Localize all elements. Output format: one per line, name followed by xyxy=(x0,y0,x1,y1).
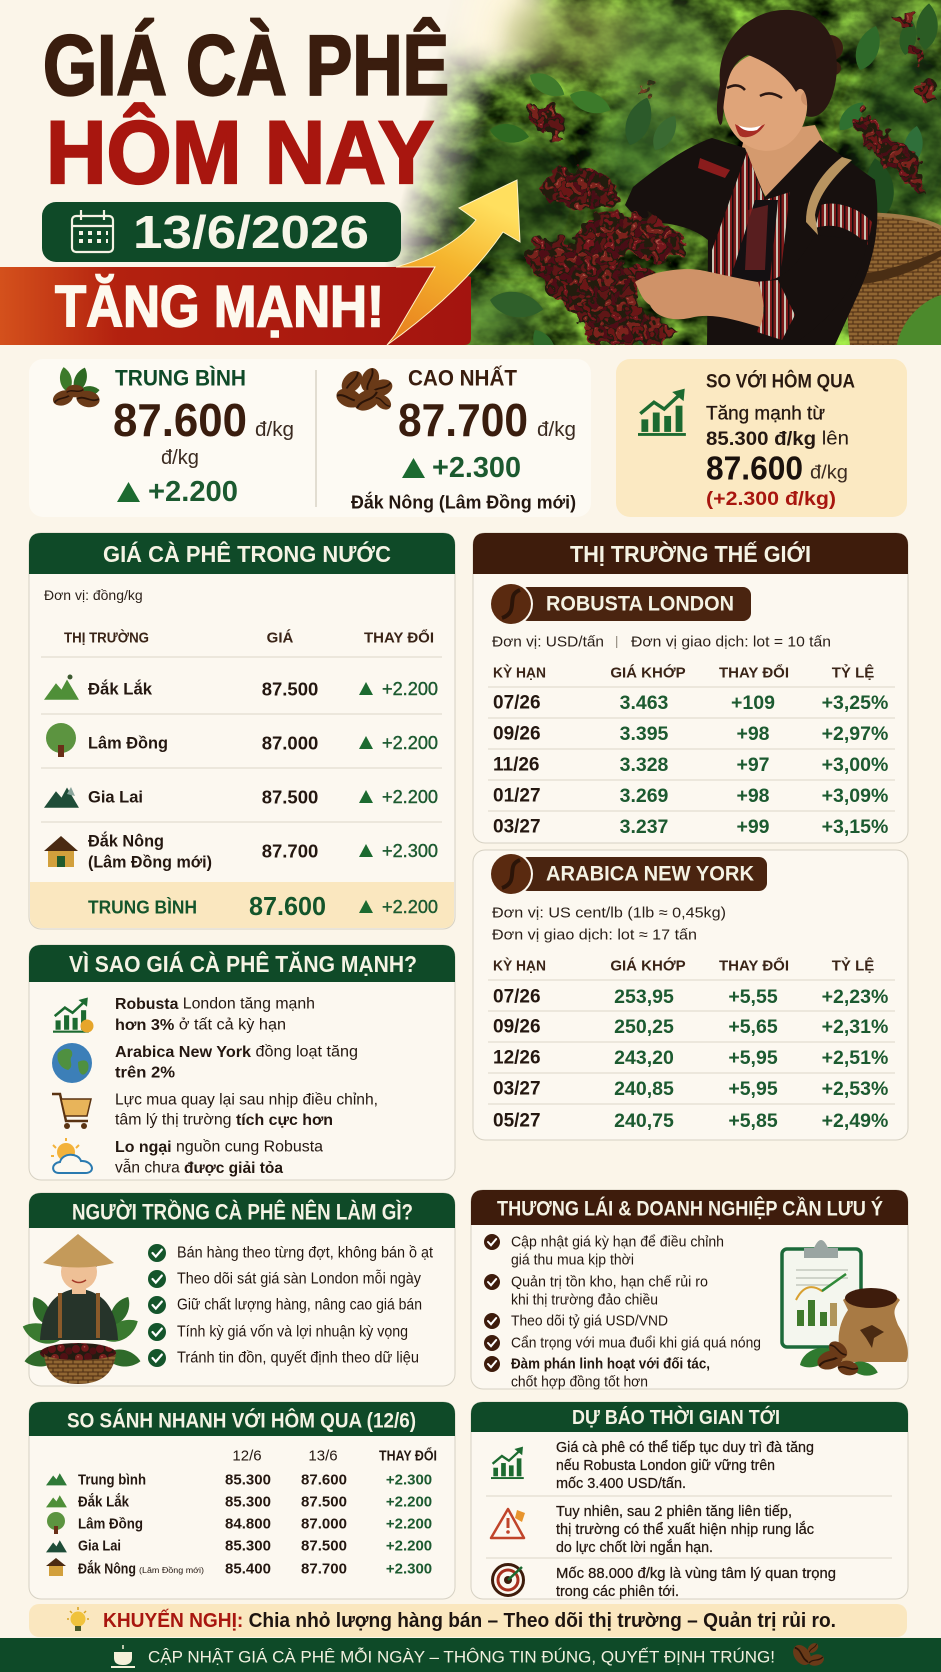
table rows: +2,51% xyxy=(822,1047,888,1069)
checklist: Giữ chất lượng hàng, nâng cao giá bán xyxy=(177,1296,422,1314)
woman: cuff xyxy=(753,280,795,340)
row values: 85.400 xyxy=(225,1560,271,1578)
woman: strap xyxy=(806,157,852,235)
row values: +2.300 xyxy=(386,1560,432,1578)
heading xyxy=(473,533,908,574)
forecast 1: nếu Robusta London giữ vững trên xyxy=(556,1458,775,1474)
panel: so với hôm qua xyxy=(616,359,907,517)
table rows: +3,25% xyxy=(822,692,888,714)
row values: +2.200 xyxy=(386,1494,432,1510)
forecast 1: mốc 3.400 USD/tấn. xyxy=(556,1476,686,1492)
table rows: 3.395 xyxy=(620,723,669,745)
table head: KỲ HẠN xyxy=(493,664,546,682)
row labels: Đắk Nông xyxy=(78,1560,136,1578)
row: Lâm Đồng: Lâm Đồng xyxy=(88,734,168,752)
table rows: +3,00% xyxy=(822,754,888,776)
reason: robusta: hơn 3% ở tất cả kỳ hạn xyxy=(115,1016,286,1034)
row values: +2.300 xyxy=(386,1472,432,1488)
table rows xyxy=(493,986,888,1132)
row values: 85.300 xyxy=(225,1472,271,1488)
row labels: Lâm Đồng xyxy=(78,1516,143,1532)
table rows: 09/26 xyxy=(493,724,541,744)
icon: sun and cloud xyxy=(51,1138,92,1173)
table head xyxy=(493,664,874,682)
icon: chart xyxy=(491,1447,524,1479)
table rows: +2,23% xyxy=(822,986,888,1008)
icon: light bulb xyxy=(67,1607,89,1631)
table header: GIÁ xyxy=(267,630,293,646)
illustration: clipboard and coffee sack xyxy=(782,1240,908,1379)
forecast 2 xyxy=(556,1504,814,1556)
heading: DỰ BÁO THỜI GIAN TỚI xyxy=(572,1405,780,1429)
checklist: Theo dõi sát giá sàn London mỗi ngày xyxy=(177,1270,421,1288)
panel: KPI trung bình và cao nhất xyxy=(29,359,591,517)
table rows: 03/27 xyxy=(493,816,541,838)
banner: tăng mạnh xyxy=(0,267,471,345)
banner: tăng mạnh: TĂNG MẠNH! xyxy=(55,274,384,340)
table rows: +109 xyxy=(731,692,775,714)
forecast 3 xyxy=(556,1566,836,1600)
table rows: 05/27 xyxy=(493,1110,541,1132)
heading xyxy=(471,1402,908,1432)
date pill: 13/6/2026 xyxy=(133,206,369,258)
table rows: +98 xyxy=(736,785,770,807)
text: footer: CẬP NHẬT GIÁ CÀ PHÊ MỖI NGÀY – THÔNG TIN ĐÚNG, QUYẾT ĐỊNH TRÚNG! xyxy=(148,1648,775,1666)
icon: globe xyxy=(52,1043,92,1083)
checklist: Tránh tin đồn, quyết định theo dữ liệu xyxy=(177,1350,419,1366)
checklist: Cẩn trọng với mua đuổi khi giá quá nóng xyxy=(511,1334,761,1352)
table head: KỲ HẠN xyxy=(493,956,546,974)
leaves xyxy=(488,2,940,369)
title: HÔM NAY xyxy=(46,102,434,202)
table rows: +3,09% xyxy=(822,785,888,807)
checklist: Cập nhật giá kỳ hạn để điều chỉnh xyxy=(511,1234,724,1250)
woman: embroidery xyxy=(712,152,790,280)
table rows: +5,55 xyxy=(728,986,778,1008)
reason: lực mua: tâm lý thị trường tích cực hơn xyxy=(115,1112,333,1128)
text: current price: đ/kg xyxy=(810,462,848,484)
row: Đắk Nông: +2.300 xyxy=(382,841,438,861)
reason: lực mua: Lực mua quay lại sau nhịp điều chỉnh, xyxy=(115,1092,378,1108)
forecast 1: Giá cà phê có thể tiếp tục duy trì đà tăng xyxy=(556,1440,814,1456)
date pill xyxy=(42,202,401,262)
table rows: +99 xyxy=(736,816,770,838)
icon: target xyxy=(492,1564,524,1596)
title xyxy=(43,18,449,202)
row values: 84.800 xyxy=(225,1516,271,1532)
text: detail xyxy=(706,404,849,450)
table rows: 11/26 xyxy=(493,754,540,776)
panel: dự báo thời gian tới xyxy=(471,1402,908,1600)
table rows: +5,85 xyxy=(728,1110,778,1132)
row: Đắk Nông: (Lâm Đồng mới) xyxy=(88,852,212,872)
arrow: rising xyxy=(387,180,520,345)
row: Đắk Nông xyxy=(44,832,438,872)
row values: 87.600 xyxy=(301,1472,347,1488)
table head: TỶ LỆ xyxy=(832,664,874,682)
woman: hair back xyxy=(830,35,843,60)
text: địa phương cao nhất: Đắk Nông (Lâm Đồng mới) xyxy=(351,492,576,512)
table rows: +98 xyxy=(736,723,770,745)
icon: cart xyxy=(52,1094,91,1129)
icon: up triangle xyxy=(402,458,425,478)
row values: 87.000 xyxy=(301,1516,347,1532)
checklist: Quản trị tồn kho, hạn chế rủi ro xyxy=(511,1274,708,1290)
table head xyxy=(493,956,874,974)
heading: NGƯỜI TRỒNG CÀ PHÊ NÊN LÀM GÌ? xyxy=(72,1200,413,1224)
table rows: 253,95 xyxy=(614,986,674,1008)
table header: THAY ĐỔI xyxy=(364,628,434,646)
row values xyxy=(225,1472,432,1578)
row: trung bình: 87.600 xyxy=(249,891,326,921)
checklist: Bán hàng theo từng đợt, không bán ồ ạt xyxy=(177,1244,434,1262)
heading xyxy=(29,1402,455,1436)
row values: 85.300 xyxy=(225,1494,271,1510)
checklist: khi thị trường đảo chiều xyxy=(511,1292,658,1308)
table head xyxy=(232,1446,437,1464)
row: Đắk Lắk: +2.200 xyxy=(382,679,438,699)
row: Gia Lai: +2.200 xyxy=(382,787,438,807)
text: units: Đơn vị: USD/tấn xyxy=(492,634,604,650)
table head: THAY ĐỔI xyxy=(379,1446,437,1464)
row: Đắk Lắk xyxy=(44,674,438,700)
table rows: +2,31% xyxy=(822,1016,888,1038)
text: đơn vị lặp: đ/kg xyxy=(161,447,199,469)
row: Gia Lai xyxy=(44,786,438,808)
woman: basket xyxy=(848,215,941,345)
reason: arabica xyxy=(115,1044,358,1082)
table rows: 240,85 xyxy=(614,1078,674,1100)
icon: coffee cup xyxy=(111,1645,135,1667)
table rows: +5,65 xyxy=(728,1016,778,1038)
table rows: 07/26 xyxy=(493,692,541,714)
table rows: +2,97% xyxy=(822,723,888,745)
text: recommendation: KHUYẾN NGHỊ: Chia nhỏ lượng hàng bán – Theo dõi thị trường – Quản trị rủi ro. xyxy=(103,1609,836,1632)
text: units: Đơn vị giao dịch: lot ≈ 17 tấn xyxy=(492,926,697,944)
reason: robusta xyxy=(115,996,315,1034)
text: detail: 85.300 đ/kg lên xyxy=(706,428,849,450)
panel: người trồng cà phê xyxy=(20,1193,455,1386)
icon: chart xyxy=(53,997,94,1033)
row values: 85.300 xyxy=(225,1538,271,1554)
text: thay đổi cao nhất: +2.300 xyxy=(432,452,521,484)
checklist xyxy=(148,1244,434,1367)
forecast 1 xyxy=(556,1440,814,1492)
row: Lâm Đồng: +2.200 xyxy=(382,733,438,753)
text: giá cao nhất: 87.700 xyxy=(398,394,528,446)
checklist: Theo dõi tỷ giá USD/VND xyxy=(511,1312,668,1330)
icon: up triangle xyxy=(117,482,140,502)
reason: arabica: Arabica New York đồng loạt tăng xyxy=(115,1044,358,1060)
table rows: 07/26 xyxy=(493,986,541,1008)
reason: nguồn cung: vẫn chưa được giải tỏa xyxy=(115,1158,283,1176)
badge: Arabica New York xyxy=(489,852,767,896)
text: units: Đơn vị giao dịch: lot = 10 tấn xyxy=(631,634,831,650)
text: trung bình: TRUNG BÌNH xyxy=(115,366,246,390)
row labels: Gia Lai xyxy=(78,1538,121,1554)
woman: blouse xyxy=(625,138,877,345)
text: units xyxy=(492,904,726,944)
row values: 87.500 xyxy=(301,1538,347,1554)
reason: arabica: trên 2% xyxy=(115,1064,175,1082)
table head: TỶ LỆ xyxy=(832,956,874,974)
table rows: +97 xyxy=(736,754,770,776)
forecast 2: thị trường có thể xuất hiện nhịp rung lắc xyxy=(556,1521,814,1538)
table header xyxy=(64,628,434,646)
woman: sleeve band xyxy=(815,204,872,245)
text: thay đổi trung bình: +2.200 xyxy=(148,476,238,508)
row labels: (Lâm Đồng mới) xyxy=(139,1565,204,1575)
checklist: Đàm phán linh hoạt với đối tác, xyxy=(511,1356,710,1372)
text: detail: Tăng mạnh từ xyxy=(706,404,825,424)
panel: Arabica New York xyxy=(473,850,908,1140)
row: Gia Lai: Gia Lai xyxy=(88,788,143,806)
icon: coffee beans xyxy=(334,365,395,415)
table header: THỊ TRƯỜNG xyxy=(64,628,149,646)
row values: +2.200 xyxy=(386,1538,432,1554)
row: Đắk Nông: Đắk Nông xyxy=(88,832,164,850)
heading: VÌ SAO GIÁ CÀ PHÊ TĂNG MẠNH? xyxy=(69,950,417,977)
heading: THƯƠNG LÁI & DOANH NGHIỆP CẦN LƯU Ý xyxy=(497,1196,883,1220)
heading xyxy=(29,1193,455,1228)
text: đơn vị: đ/kg xyxy=(255,419,294,441)
panel: thương lái và doanh nghiệp xyxy=(471,1190,908,1390)
footer xyxy=(0,1638,941,1672)
table head: 13/6 xyxy=(308,1448,338,1464)
forecast 3: Mốc 88.000 đ/kg là vùng tâm lý quan trọng xyxy=(556,1566,836,1582)
row labels: Đắk Lắk xyxy=(78,1492,130,1510)
badge: Arabica New York: ARABICA NEW YORK xyxy=(546,862,754,886)
icon: growth chart xyxy=(638,389,686,436)
table rows: +2,53% xyxy=(822,1078,888,1100)
panel: thị trường thế giới – Robusta London xyxy=(473,533,908,843)
panel: giá cà phê trong nước xyxy=(29,533,455,929)
table rows: 3.269 xyxy=(620,785,669,807)
icon: coffee beans with leaves xyxy=(51,366,101,409)
icon: warning xyxy=(491,1509,525,1538)
table rows: 250,25 xyxy=(614,1016,674,1038)
forecast 2: do lực chốt lời ngắn hạn. xyxy=(556,1539,713,1556)
row: Đắk Nông: 87.700 xyxy=(262,840,318,862)
text: current price: 87.600 xyxy=(706,450,803,486)
heading xyxy=(29,533,455,574)
row: trung bình: TRUNG BÌNH xyxy=(88,896,197,918)
table rows: 3.237 xyxy=(620,816,668,838)
table rows: 12/26 xyxy=(493,1048,541,1068)
row values: 87.700 xyxy=(301,1560,347,1578)
reason: robusta: Robusta London tăng mạnh xyxy=(115,996,315,1012)
row icons xyxy=(46,1473,67,1576)
row values: 87.500 xyxy=(301,1494,347,1510)
row: Lâm Đồng xyxy=(46,723,438,757)
row: Đắk Lắk: 87.500 xyxy=(262,678,318,700)
table rows: 03/27 xyxy=(493,1078,541,1100)
table head: THAY ĐỔI xyxy=(719,664,789,682)
reason: nguồn cung: Lo ngại nguồn cung Robusta xyxy=(115,1138,323,1156)
heading: THỊ TRƯỜNG THẾ GIỚI xyxy=(570,540,811,567)
recommendation bar xyxy=(29,1604,907,1637)
woman: face xyxy=(724,56,807,151)
row: Gia Lai: 87.500 xyxy=(262,786,318,808)
table head: 12/6 xyxy=(232,1448,262,1464)
table rows: 243,20 xyxy=(614,1047,674,1069)
table rows: 3.463 xyxy=(620,692,669,714)
row labels xyxy=(78,1472,204,1578)
row: trung bình: +2.200 xyxy=(382,897,438,917)
heading xyxy=(29,945,455,982)
icon: beans xyxy=(789,1641,825,1668)
heading: GIÁ CÀ PHÊ TRONG NƯỚC xyxy=(103,540,391,567)
text: change: (+2.300 đ/kg) xyxy=(706,488,836,510)
row: Đắk Lắk: Đắk Lắk xyxy=(88,680,153,698)
checklist: chốt hợp đồng tốt hơn xyxy=(511,1374,648,1390)
foreground leaf xyxy=(897,295,941,345)
text: cao nhất: CAO NHẤT xyxy=(408,366,518,390)
table rows: +5,95 xyxy=(728,1078,778,1100)
text: unit: Đơn vị: đồng/kg xyxy=(44,587,143,603)
table head: GIÁ KHỚP xyxy=(610,664,686,682)
table head: GIÁ KHỚP xyxy=(610,956,686,974)
woman: forearm sleeve xyxy=(770,239,868,280)
heading xyxy=(471,1190,908,1225)
berry clusters xyxy=(528,14,936,345)
row: trung bình xyxy=(30,882,454,928)
berries in front of arm xyxy=(618,214,685,262)
panel: vì sao giá tăng xyxy=(29,945,455,1180)
panel: so sánh nhanh xyxy=(29,1402,455,1599)
table rows: 3.328 xyxy=(620,754,669,776)
checklist: Tính kỳ giá vốn và lợi nhuận kỳ vọng xyxy=(177,1324,408,1340)
checklist: giá thu mua kịp thời xyxy=(511,1252,634,1268)
table rows: +2,49% xyxy=(822,1110,888,1132)
icon: calendar xyxy=(72,210,113,252)
table rows: 240,75 xyxy=(614,1110,674,1132)
illustration: farmer xyxy=(20,1234,142,1384)
woman: hair xyxy=(717,10,837,125)
woman: hand xyxy=(635,269,764,327)
badge: Robusta London: ROBUSTA LONDON xyxy=(546,592,734,616)
woman: neck xyxy=(740,125,825,200)
row labels: Trung bình xyxy=(78,1472,146,1488)
table rows xyxy=(493,692,888,838)
badge: Robusta London xyxy=(489,582,751,626)
header photo: coffee harvest xyxy=(387,0,941,345)
table head: THAY ĐỔI xyxy=(719,956,789,974)
row values: +2.200 xyxy=(386,1516,432,1532)
forecast 2: Tuy nhiên, sau 2 phiên tăng liên tiếp, xyxy=(556,1504,792,1520)
row: Lâm Đồng: 87.000 xyxy=(262,732,318,754)
table rows: 09/26 xyxy=(493,1016,541,1038)
forecast 3: trong các phiên tới. xyxy=(556,1584,679,1600)
text: units: | xyxy=(615,634,618,648)
text: heading: SO VỚI HÔM QUA xyxy=(706,370,855,392)
table rows: 01/27 xyxy=(493,786,541,806)
text: giá trung bình: 87.600 xyxy=(113,394,247,446)
heading: SO SÁNH NHANH VỚI HÔM QUA (12/6) xyxy=(67,1408,416,1432)
text: đơn vị: đ/kg xyxy=(537,419,576,441)
reason: nguồn cung xyxy=(115,1138,323,1176)
woman: eyes and smile xyxy=(727,85,782,98)
text: units: Đơn vị: US cent/lb (1lb ≈ 0,45kg) xyxy=(492,904,726,922)
checklist xyxy=(484,1234,761,1390)
reason: lực mua xyxy=(115,1092,378,1128)
title: GIÁ CÀ PHÊ xyxy=(43,18,449,114)
text: units xyxy=(492,634,831,650)
table rows: +3,15% xyxy=(822,816,888,838)
table rows: +5,95 xyxy=(728,1047,778,1069)
